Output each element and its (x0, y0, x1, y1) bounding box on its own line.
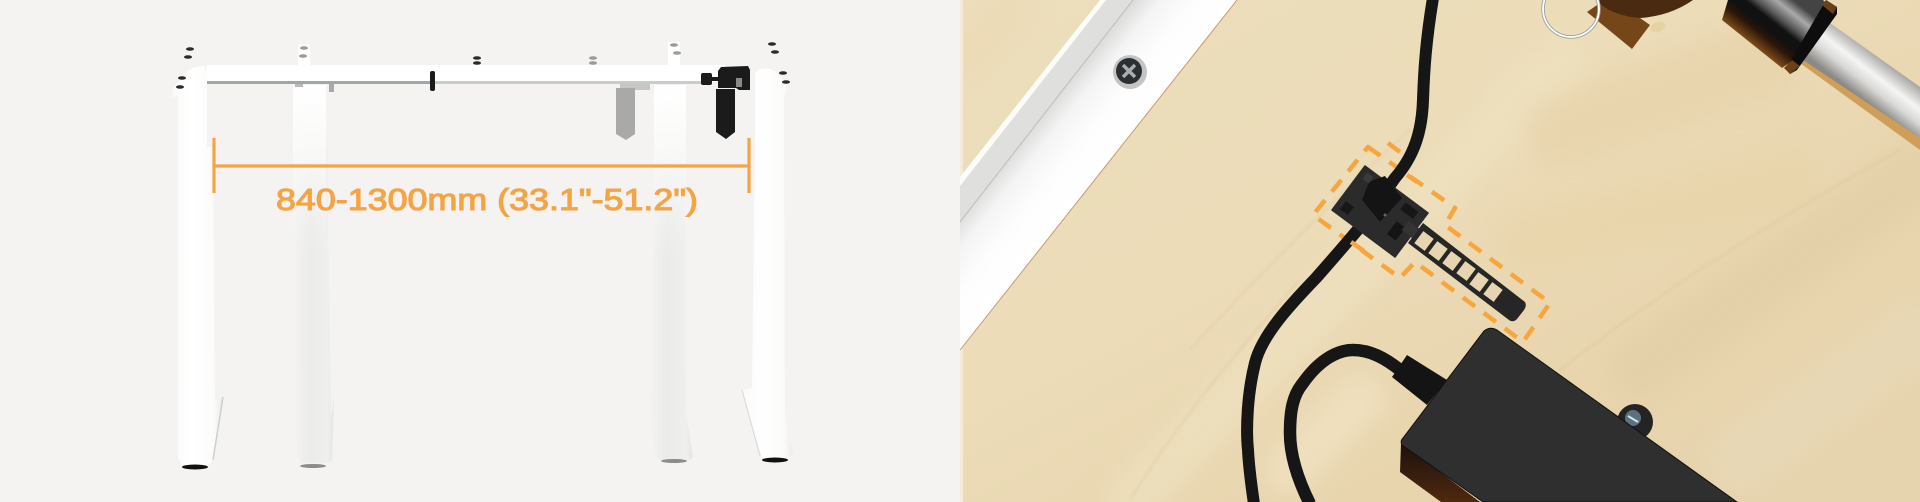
width dimension line (214, 138, 749, 193)
frame leg: front right (742, 68, 793, 462)
frame leg: rear right (647, 85, 693, 463)
panel: desk frame width range (0, 0, 960, 502)
power cable to clip (1247, 0, 1433, 502)
white desk rail (960, 0, 1237, 350)
black lift motor and gearbox (701, 66, 750, 139)
panel: cable clip on desk underside (960, 0, 1920, 502)
frame leg: front left (172, 66, 223, 470)
rail screw (1113, 55, 1147, 89)
width dimension label: 840-1300mm (33.1"-51.2") (276, 182, 698, 217)
wood tabletop (960, 0, 1920, 502)
black power adapter (1392, 328, 1737, 502)
metal ring (1543, 0, 1599, 37)
rod clamp (430, 71, 435, 91)
adhesive cable clip with strap (1332, 166, 1526, 321)
box screw and washer (1618, 404, 1653, 436)
gray rear lift motor (616, 83, 650, 140)
frame leg: rear left (292, 85, 334, 468)
dash segments over cable (1351, 143, 1417, 251)
dashed highlight around clip (1313, 147, 1550, 342)
adapter cable (1290, 350, 1400, 502)
brown mounting block (1587, 0, 1693, 49)
mounting screws (176, 42, 790, 89)
desk frame crossbeam (207, 65, 725, 92)
black collar and silver rod (1722, 0, 1920, 150)
